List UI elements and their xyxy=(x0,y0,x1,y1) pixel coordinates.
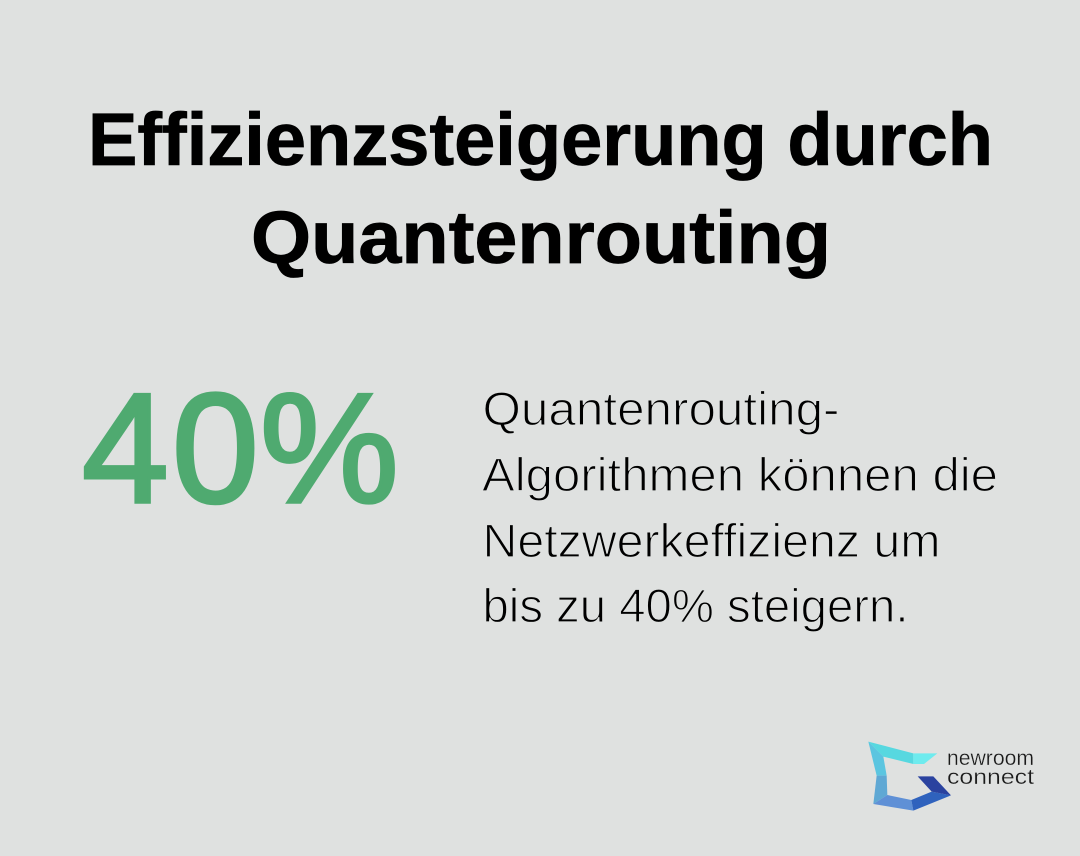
icon: logo mark xyxy=(868,742,951,811)
big statistic: 40%: % xyxy=(260,362,399,536)
logo wordmark: connect xyxy=(947,766,1034,789)
logo wordmark xyxy=(947,747,1034,789)
title xyxy=(88,98,993,279)
logo: newroom connect xyxy=(868,742,1034,811)
logo wordmark: newroom xyxy=(947,747,1034,770)
description text: bis zu 40% steigern. xyxy=(482,579,908,632)
description text: Netzwerkeffizienz um xyxy=(482,514,940,567)
description text: Quantenrouting- xyxy=(482,382,840,435)
title: Quantenrouting xyxy=(251,196,831,279)
description text: Algorithmen können die xyxy=(482,448,998,501)
title: Effizienzsteigerung durch xyxy=(88,98,993,181)
description text xyxy=(482,382,998,632)
big statistic: 40%: 0 xyxy=(172,362,259,536)
big statistic: 40%: 4 xyxy=(82,362,169,536)
